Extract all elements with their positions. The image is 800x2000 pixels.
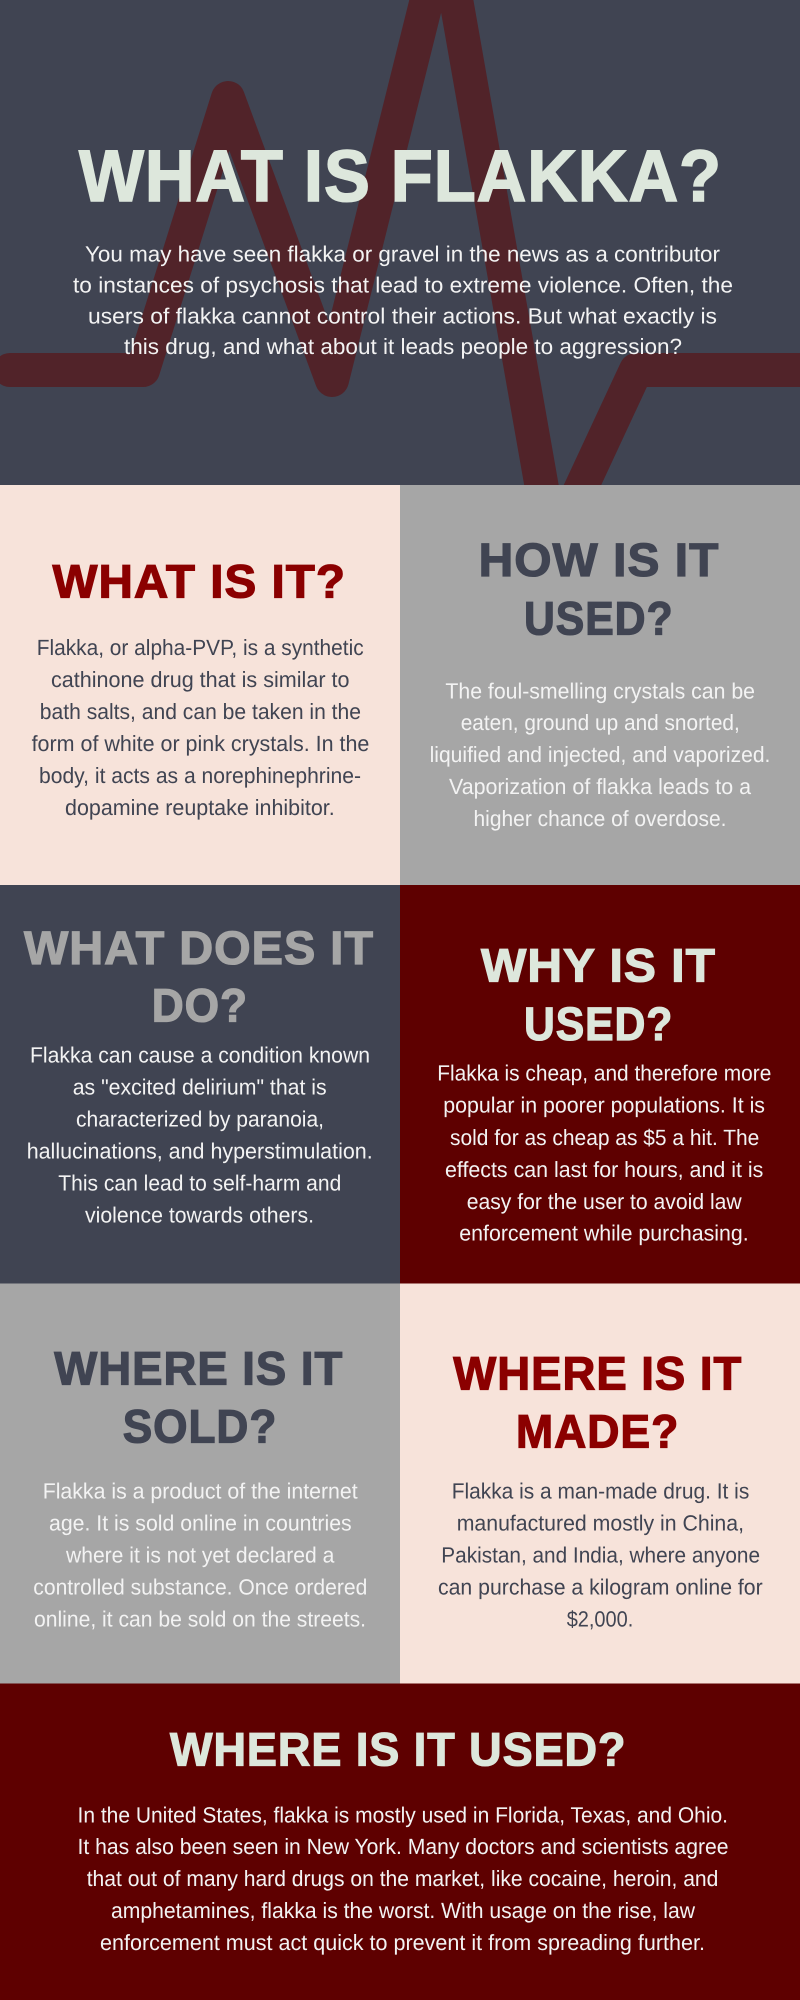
text block: where is it used: In the United States, flakka is mostly used in Florida, Texas, and Ohio.: [78, 1802, 728, 1827]
text block: where is it sold: age. It is sold online in countries: [49, 1510, 352, 1536]
panel: what does it do: [0, 885, 400, 1284]
heading: where is it made: [453, 1346, 742, 1457]
text block: where is it used: enforcement must act quick to prevent it from spreading further.: [100, 1930, 705, 1955]
text block: how is it used: [430, 678, 770, 831]
panel: header: [0, 0, 800, 485]
text block: where is it sold: where it is not yet declared a: [65, 1543, 335, 1568]
heading: where is it sold: [54, 1341, 343, 1452]
heading: what does it do: [24, 921, 374, 1032]
text block: what does it do: violence towards others.: [85, 1203, 314, 1228]
text block: why is it used: Flakka is cheap, and therefore more: [437, 1061, 771, 1086]
text block: where is it sold: Flakka is a product of the internet: [43, 1478, 358, 1503]
text block: what does it do: Flakka can cause a condition known: [30, 1042, 370, 1067]
text block: where is it made: manufactured mostly in China,: [457, 1510, 744, 1536]
text block: intro: to instances of psychosis that lead to extreme violence. Often, the: [73, 272, 733, 298]
text block: why is it used: [437, 1061, 771, 1246]
text block: what is it: cathinone drug that is similar to: [51, 667, 350, 692]
text block: how is it used: higher chance of overdose.: [474, 806, 726, 831]
text block: why is it used: effects can last for hours, and it is: [445, 1157, 763, 1182]
heading: where is it sold: WHERE IS IT: [54, 1341, 343, 1394]
text block: how is it used: liquified and injected, and vaporized.: [430, 742, 770, 767]
heading: why is it used: WHY IS IT: [481, 939, 716, 992]
text block: how is it used: eaten, ground up and snorted,: [461, 710, 740, 735]
text block: how is it used: The foul-smelling crystals can be: [445, 678, 755, 703]
text block: what is it: dopamine reuptake inhibitor.: [65, 795, 335, 820]
text block: why is it used: easy for the user to avoid law: [467, 1189, 742, 1214]
text block: where is it made: Pakistan, and India, where anyone: [441, 1543, 760, 1568]
text block: what is it: Flakka, or alpha-PVP, is a synthetic: [37, 635, 364, 660]
heading: how is it used: USED?: [524, 591, 674, 644]
heading: why is it used: USED?: [524, 997, 673, 1050]
text block: why is it used: sold for as cheap as $5 a hit. The: [450, 1125, 759, 1150]
text block: intro: You may have seen flakka or gravel in the news as a contributor: [85, 242, 720, 267]
text block: what is it: form of white or pink crystals. In the: [32, 731, 369, 756]
text block: what does it do: This can lead to self-harm and: [58, 1171, 341, 1196]
text block: what does it do: as "excited delirium" that is: [73, 1074, 327, 1099]
text block: where is it made: can purchase a kilogram online for: [438, 1575, 763, 1600]
text block: where is it made: $2,000.: [567, 1607, 633, 1632]
icon: heartbeat line: [0, 0, 800, 485]
text block: how is it used: Vaporization of flakka leads to a: [449, 774, 752, 799]
panel: how is it used: [400, 485, 800, 885]
panel: where is it sold: [0, 1284, 400, 1684]
text block: what does it do: characterized by paranoia,: [76, 1106, 324, 1132]
panel: why is it used: [400, 885, 800, 1284]
text block: where is it used: It has also been seen in New York. Many doctors and scientists agree: [78, 1834, 728, 1859]
heading: where is it made: WHERE IS IT: [453, 1346, 742, 1399]
text block: where is it made: Flakka is a man-made drug. It is: [452, 1478, 749, 1503]
heading: where is it used: WHERE IS IT USED?: [170, 1723, 626, 1776]
heading: how is it used: [479, 533, 719, 644]
text block: intro: this drug, and what about it leads people to aggression?: [124, 334, 682, 359]
text block: intro: [73, 242, 733, 359]
text block: what is it: bath salts, and can be taken in the: [40, 699, 361, 724]
heading: where is it made: MADE?: [516, 1404, 679, 1457]
heading: what is it: WHAT IS IT?: [52, 554, 346, 607]
text block: what does it do: hallucinations, and hyperstimulation.: [27, 1138, 373, 1164]
text block: what is it: [32, 635, 369, 820]
text block: where is it sold: online, it can be sold on the streets.: [34, 1607, 366, 1632]
text block: what is it: body, it acts as a norephinephrine-: [39, 763, 361, 788]
title: WHAT IS FLAKKA?: [79, 136, 722, 217]
text block: intro: users of flakka cannot control their actions. But what exactly is: [88, 303, 717, 328]
heading: what does it do: DO?: [152, 979, 248, 1032]
text block: where is it sold: controlled substance. Once ordered: [33, 1575, 367, 1600]
heading: how is it used: HOW IS IT: [479, 533, 719, 586]
text block: where is it used: [78, 1802, 728, 1955]
heading: where is it sold: SOLD?: [123, 1399, 277, 1452]
text block: why is it used: popular in poorer populations. It is: [443, 1093, 765, 1118]
panel: where is it made: [400, 1284, 800, 1684]
panel: where is it used: [0, 1684, 800, 2000]
panel: what is it: [0, 485, 400, 885]
text block: where is it made: [438, 1478, 763, 1632]
text block: why is it used: enforcement while purchasing.: [459, 1221, 749, 1246]
text block: what does it do: [27, 1042, 373, 1228]
text block: where is it used: amphetamines, flakka is the worst. With usage on the rise, law: [111, 1898, 695, 1923]
heading: what does it do: WHAT DOES IT: [24, 921, 374, 974]
heading: why is it used: [481, 939, 716, 1050]
text block: where is it sold: [33, 1478, 367, 1632]
text block: where is it used: that out of many hard drugs on the market, like cocaine, heroin, and: [87, 1866, 718, 1891]
